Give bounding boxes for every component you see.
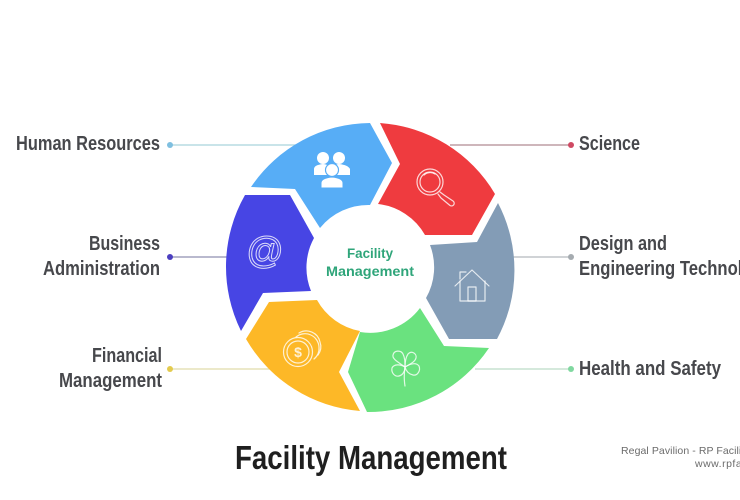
segment: health and safety — [348, 308, 489, 412]
label: human resources: Human Resources — [16, 133, 160, 155]
label: science: Science — [579, 133, 640, 155]
connector: human resources — [167, 142, 296, 148]
center label: Management — [326, 263, 414, 279]
segment: science — [378, 123, 495, 235]
footer credit — [621, 445, 740, 470]
icon: people — [314, 152, 350, 188]
label: business administration — [43, 233, 160, 280]
label: financial management — [59, 345, 162, 392]
label: business administration: Business — [89, 233, 160, 255]
label: design and engineering technology — [579, 233, 740, 280]
icon: house — [455, 270, 489, 301]
label: financial management: Management — [59, 370, 162, 392]
segment: business administration — [226, 195, 314, 331]
icon: magnifier — [417, 169, 454, 206]
icon: at sign: @ — [246, 230, 284, 271]
segment: design and engineering — [426, 203, 514, 339]
title: Facility Management — [235, 439, 507, 476]
label: business administration: Administration — [43, 258, 160, 280]
connector: business administration — [167, 254, 232, 260]
segment: financial management — [246, 300, 360, 411]
connector: design and engineering — [510, 254, 574, 260]
connector: health and safety — [475, 366, 574, 372]
icon: coins — [284, 331, 321, 366]
icon: clover — [392, 351, 420, 386]
label: financial management: Financial — [92, 345, 162, 367]
connector: science — [450, 142, 574, 148]
label: design and engineering technology: Design and — [579, 233, 667, 255]
segment: human resources — [251, 123, 392, 228]
center label: Facility — [347, 245, 393, 261]
center label — [326, 245, 414, 279]
icon: coins: $ — [294, 344, 302, 360]
connector: financial management — [167, 366, 272, 372]
